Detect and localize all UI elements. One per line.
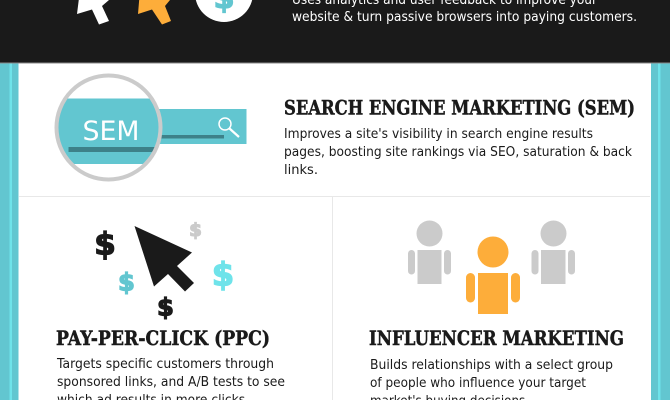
icon: small magnifying glass bbox=[219, 118, 239, 137]
text: PPC description bbox=[56, 356, 285, 400]
icon: black cursor bbox=[134, 226, 194, 292]
text: PPC description: sponsored links, and A/B tests to see bbox=[57, 374, 285, 390]
icon: influencer people bbox=[408, 220, 575, 314]
icon: white cursor bbox=[77, 0, 109, 24]
right teal border bbox=[651, 63, 670, 400]
icon: PPC cursor with dollars: $ bbox=[94, 226, 116, 262]
left teal border bbox=[0, 63, 18, 400]
heading: PPC: PAY-PER-CLICK (PPC) bbox=[56, 326, 270, 350]
icon: SEM magnifier over search bar: SEM bbox=[82, 116, 140, 147]
icon: SEM magnifier over search bar bbox=[56, 75, 246, 180]
icon: PPC cursor with dollars bbox=[94, 220, 234, 322]
text: SEM description: Improves a site's visibility in search engine results bbox=[284, 126, 593, 142]
icon: orange centre person bbox=[466, 236, 520, 314]
text: SEM description: links. bbox=[284, 162, 318, 178]
panel: dark header bbox=[0, 0, 670, 64]
icon: dollar coin bbox=[195, 0, 253, 22]
text: SEM description bbox=[284, 126, 632, 178]
text: influencer description: of people who influence your target bbox=[370, 375, 586, 391]
text: SEM description: pages, boosting site rankings via SEO, saturation & back bbox=[284, 144, 632, 160]
text: PPC description: Targets specific customers through bbox=[56, 356, 274, 372]
header description: website & turn passive browsers into paying customers. bbox=[292, 9, 637, 25]
icon: right grey person bbox=[532, 220, 575, 284]
header description bbox=[292, 0, 637, 25]
icon: PPC cursor with dollars: $ bbox=[212, 256, 234, 294]
text: influencer description bbox=[370, 357, 613, 400]
icon: PPC cursor with dollars: $ bbox=[157, 294, 174, 322]
icon: PPC cursor with dollars: $ bbox=[189, 220, 202, 241]
icon: left grey person bbox=[408, 220, 451, 284]
heading: influencer marketing: INFLUENCER MARKETING bbox=[369, 326, 624, 350]
text: influencer description: Builds relationships with a select group bbox=[370, 357, 613, 373]
icon: orange cursor bbox=[138, 0, 171, 24]
icon: PPC cursor with dollars: $ bbox=[118, 268, 135, 296]
